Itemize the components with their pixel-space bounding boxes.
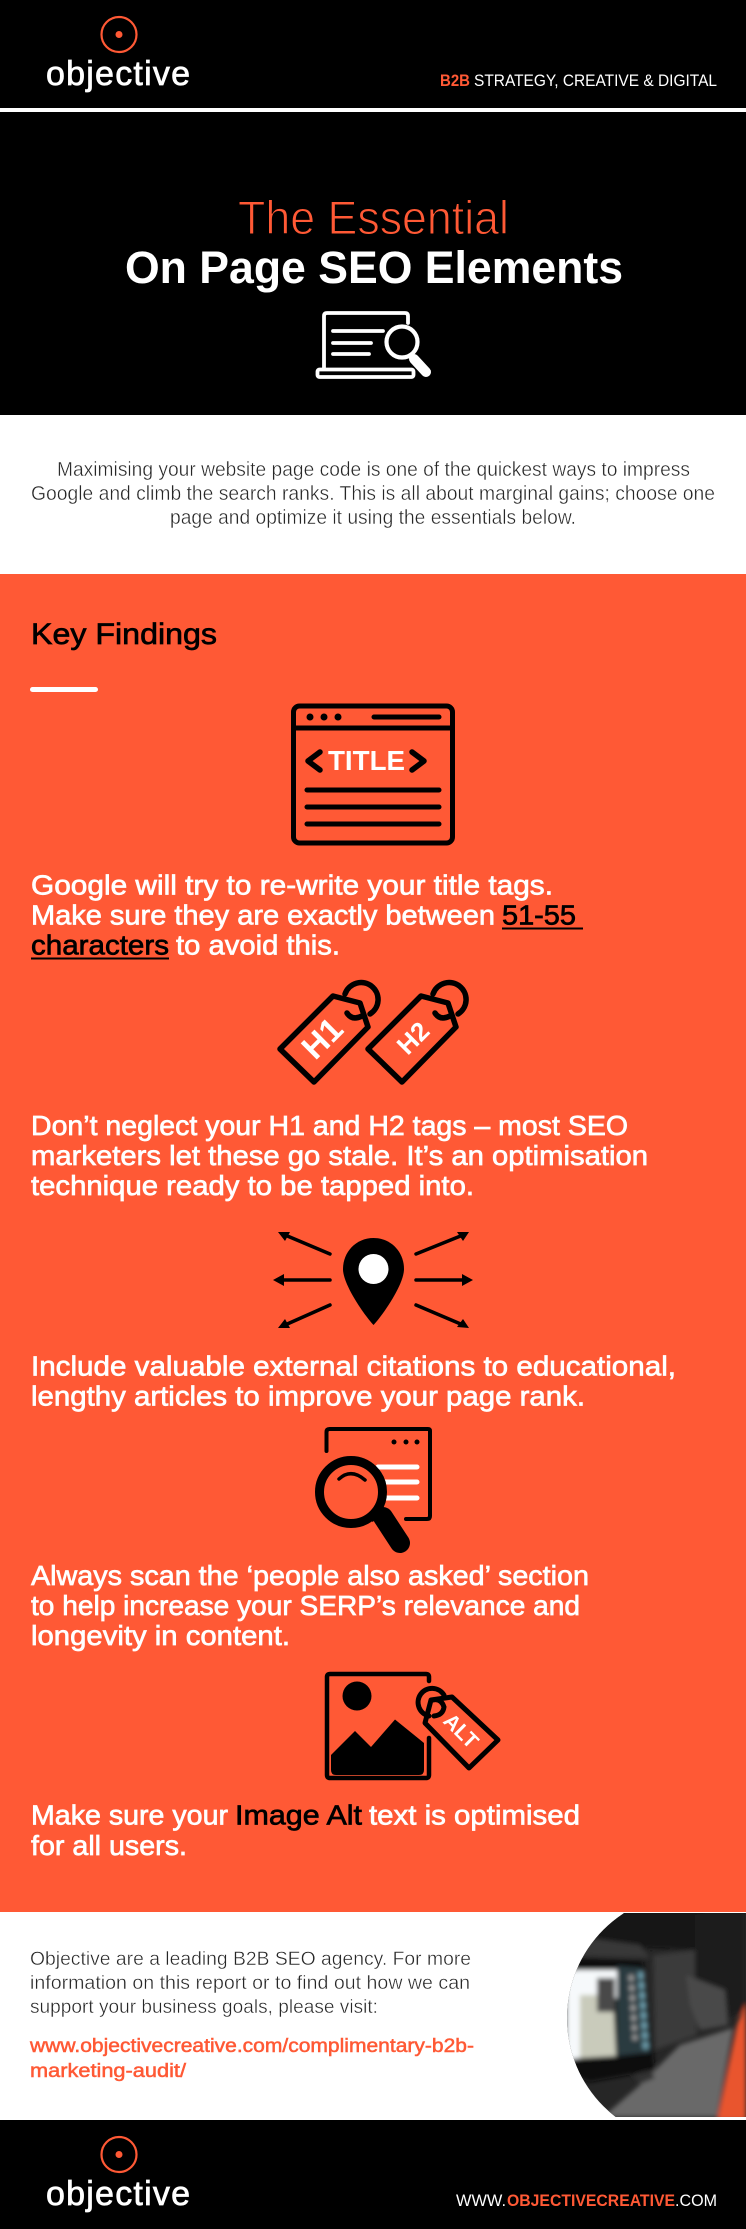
logo: objective: objective [46, 55, 190, 93]
text: citations finding: Include valuable external citations to educational, [31, 1350, 676, 1382]
title: The Essential [238, 191, 509, 244]
icon: H2 tag: H2 [391, 1016, 435, 1060]
text: citations finding: lengthy articles to improve your page rank. [31, 1380, 585, 1412]
text: website address: OBJECTIVECREATIVE [507, 2192, 675, 2210]
text: audit link: www.objectivecreative.com/complimentary-b2b- [29, 2036, 474, 2057]
icon: image with alt tag [327, 1674, 498, 1778]
text: audit link [29, 2036, 474, 2082]
text: citations finding [31, 1350, 676, 1412]
title: On Page SEO Elements [125, 242, 623, 293]
panel: intro text: Maximising your website page code is one of the quickest ways to impress [57, 459, 690, 481]
text: image alt finding: Image Alt [235, 1800, 362, 1830]
icon: laptop with magnifier [318, 313, 426, 377]
title [125, 191, 623, 293]
tagline: B2B [440, 72, 470, 90]
icon: H1 tag [280, 983, 378, 1082]
logo: objective [46, 17, 190, 93]
panel: key findings [0, 574, 746, 1912]
text: title tags finding: Make sure they are exactly between [31, 900, 495, 930]
icon: H1 tag: H1 [294, 1010, 350, 1066]
text: about objective: Objective are a leading B2B SEO agency. For more [30, 1949, 471, 1970]
heading: key findings: Key Findings [31, 618, 217, 651]
panel: closing call to action [30, 1913, 746, 2117]
logo: objective footer [46, 2137, 190, 2213]
icon: map pin with arrows [273, 1232, 473, 1328]
icon: H1 and H2 tags [280, 983, 466, 1082]
text: title tags finding [31, 870, 583, 960]
text: people also asked finding: Always scan the ‘people also asked’ section [31, 1560, 589, 1591]
icon: title tag browser [294, 706, 452, 843]
text: about objective: support your business goals, please visit: [30, 1997, 378, 2018]
text: title tags finding: Google will try to re-write your title tags. [31, 870, 553, 900]
tagline: STRATEGY, CREATIVE & DIGITAL [474, 72, 717, 90]
panel: intro text: page and optimize it using the essentials below. [170, 507, 576, 529]
text: website address [456, 2192, 717, 2210]
text: about objective [30, 1949, 471, 2018]
text: audit link: marketing-audit/ [30, 2061, 187, 2082]
text: image alt finding [31, 1800, 580, 1861]
text: website address: WWW. [456, 2192, 506, 2210]
text: people also asked finding: longevity in content. [31, 1620, 290, 1651]
icon: H2 tag [368, 983, 466, 1082]
photo: person at monitor [567, 1913, 746, 2117]
text: people also asked finding: to help increase your SERP’s relevance and [31, 1590, 580, 1621]
panel: top header [0, 0, 746, 415]
heading: key findings [30, 618, 217, 692]
panel: footer [0, 2120, 746, 2229]
text: website address: .COM [675, 2192, 717, 2210]
text: image alt finding: for all users. [31, 1830, 187, 1861]
text: H1 and H2 finding [31, 1110, 648, 1201]
panel: intro text: Google and climb the search ranks. This is all about marginal gains; choose one [31, 483, 715, 505]
icon: image with alt tag: ALT [439, 1709, 483, 1753]
text: H1 and H2 finding: marketers let these go stale. It’s an optimisation [31, 1140, 648, 1171]
text: about objective: information on this report or to find out how we can [30, 1973, 470, 1994]
text: H1 and H2 finding: technique ready to be tapped into. [31, 1170, 474, 1201]
logo: objective footer: objective [46, 2175, 190, 2213]
text: H1 and H2 finding: Don’t neglect your H1 and H2 tags – most SEO [31, 1110, 628, 1141]
icon: title tag browser: TITLE [328, 745, 405, 776]
text: image alt finding: text is optimised [369, 1800, 580, 1830]
text: title tags finding: characters [31, 930, 169, 960]
text: people also asked finding [31, 1560, 589, 1651]
icon: magnifier over document [320, 1429, 430, 1543]
panel: intro text [0, 415, 746, 574]
text: title tags finding: to avoid this. [176, 930, 340, 960]
text: title tags finding: 51-55 [502, 900, 576, 930]
text: image alt finding: Make sure your [31, 1800, 228, 1830]
